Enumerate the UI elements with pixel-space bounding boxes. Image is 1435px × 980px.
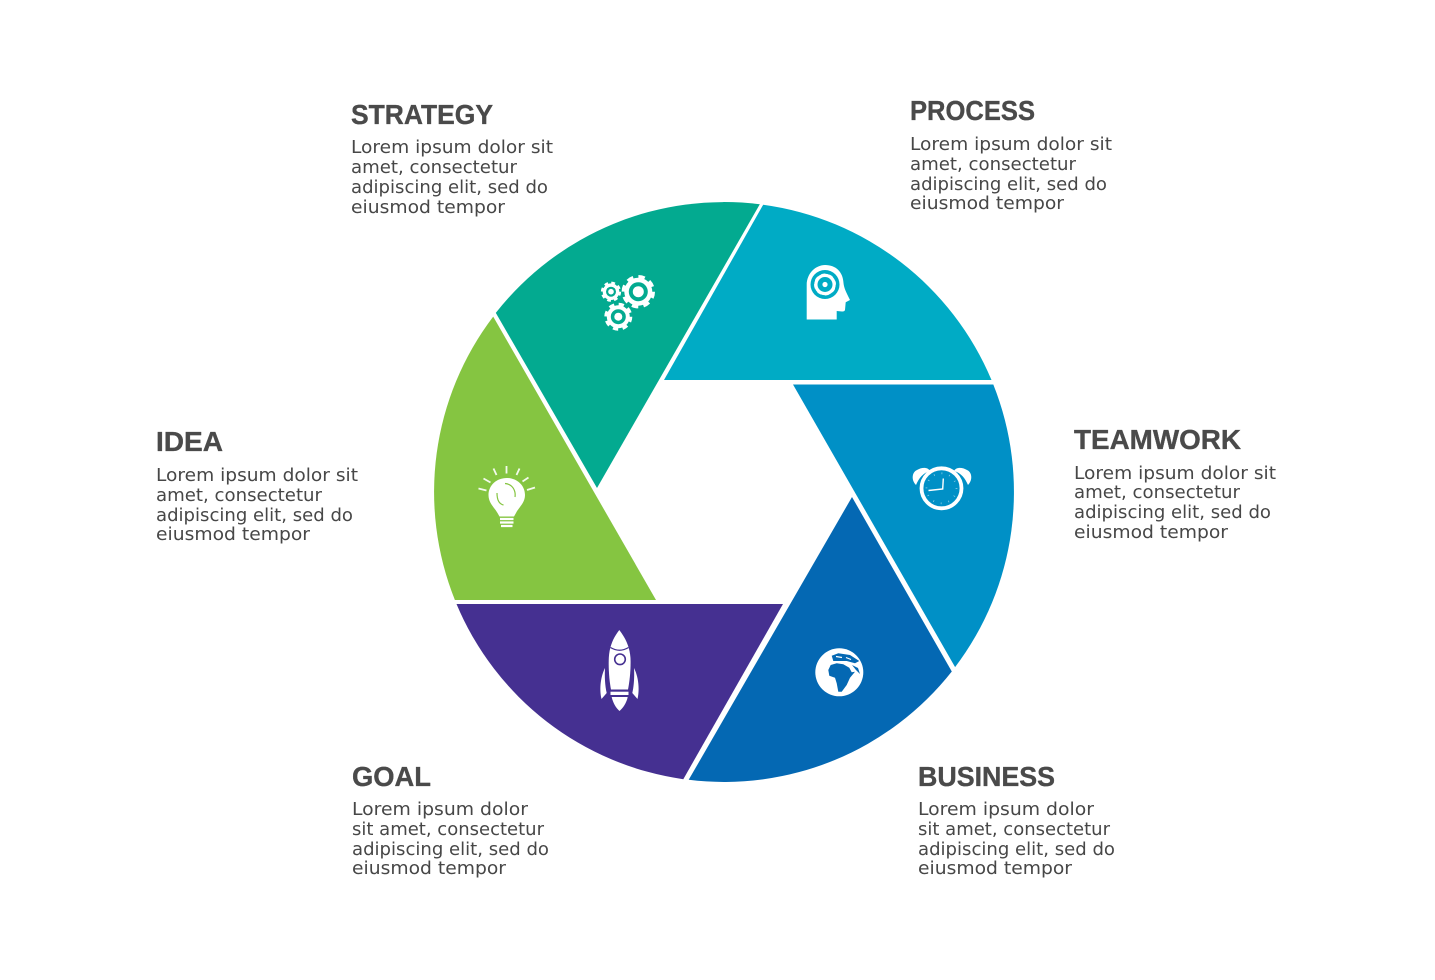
text block: strategy bbox=[351, 99, 553, 218]
segment: teamwork bbox=[793, 384, 1014, 667]
text block: goal: sit amet, consectetur bbox=[352, 820, 545, 840]
icon: globe bbox=[815, 648, 863, 696]
text block: process bbox=[910, 95, 1112, 214]
text block: teamwork: amet, consectetur bbox=[1074, 483, 1241, 503]
text block: strategy: eiusmod tempor bbox=[351, 198, 506, 218]
text block: idea: amet, consectetur bbox=[156, 486, 323, 506]
text block: process: amet, consectetur bbox=[910, 155, 1077, 175]
text block: strategy: STRATEGY bbox=[351, 99, 493, 130]
segment: strategy bbox=[496, 202, 760, 488]
text block: goal: GOAL bbox=[352, 761, 431, 792]
text block: idea bbox=[156, 426, 358, 545]
text block: process: adipiscing elit, sed do bbox=[910, 175, 1107, 195]
text block: idea: eiusmod tempor bbox=[156, 525, 311, 545]
text block: process: Lorem ipsum dolor sit bbox=[910, 135, 1112, 155]
text block: strategy: amet, consectetur bbox=[351, 158, 518, 178]
text block: business bbox=[918, 761, 1115, 879]
text block: idea: IDEA bbox=[156, 426, 223, 457]
segment: goal bbox=[456, 604, 783, 779]
text block: business: BUSINESS bbox=[918, 761, 1055, 792]
text block: teamwork: TEAMWORK bbox=[1074, 424, 1241, 455]
text block: goal bbox=[352, 761, 549, 879]
text block: teamwork: Lorem ipsum dolor sit bbox=[1074, 464, 1276, 484]
text block: teamwork: eiusmod tempor bbox=[1074, 523, 1229, 543]
icon: rocket bbox=[600, 630, 639, 711]
text block: teamwork: adipiscing elit, sed do bbox=[1074, 503, 1271, 523]
icon: light bulb bbox=[478, 466, 535, 526]
text block: business: sit amet, consectetur bbox=[918, 820, 1111, 840]
icon: alarm clock bbox=[913, 468, 971, 508]
text block: idea: Lorem ipsum dolor sit bbox=[156, 466, 358, 486]
text block: business: Lorem ipsum dolor bbox=[918, 800, 1095, 820]
text block: process: PROCESS bbox=[910, 95, 1035, 126]
segment: business bbox=[689, 497, 952, 782]
text block: teamwork bbox=[1074, 424, 1276, 543]
text block: idea: adipiscing elit, sed do bbox=[156, 506, 353, 526]
icon: head with gear bbox=[807, 265, 850, 320]
text block: strategy: adipiscing elit, sed do bbox=[351, 178, 548, 198]
icon: gears bbox=[602, 277, 653, 329]
text block: goal: adipiscing elit, sed do bbox=[352, 840, 549, 860]
text block: strategy: Lorem ipsum dolor sit bbox=[351, 138, 553, 158]
text block: business: adipiscing elit, sed do bbox=[918, 840, 1115, 860]
text block: goal: eiusmod tempor bbox=[352, 859, 507, 879]
text block: goal: Lorem ipsum dolor bbox=[352, 800, 529, 820]
segment: idea bbox=[434, 317, 656, 600]
text block: business: eiusmod tempor bbox=[918, 859, 1073, 879]
segment: process bbox=[664, 205, 992, 380]
text block: process: eiusmod tempor bbox=[910, 194, 1065, 214]
